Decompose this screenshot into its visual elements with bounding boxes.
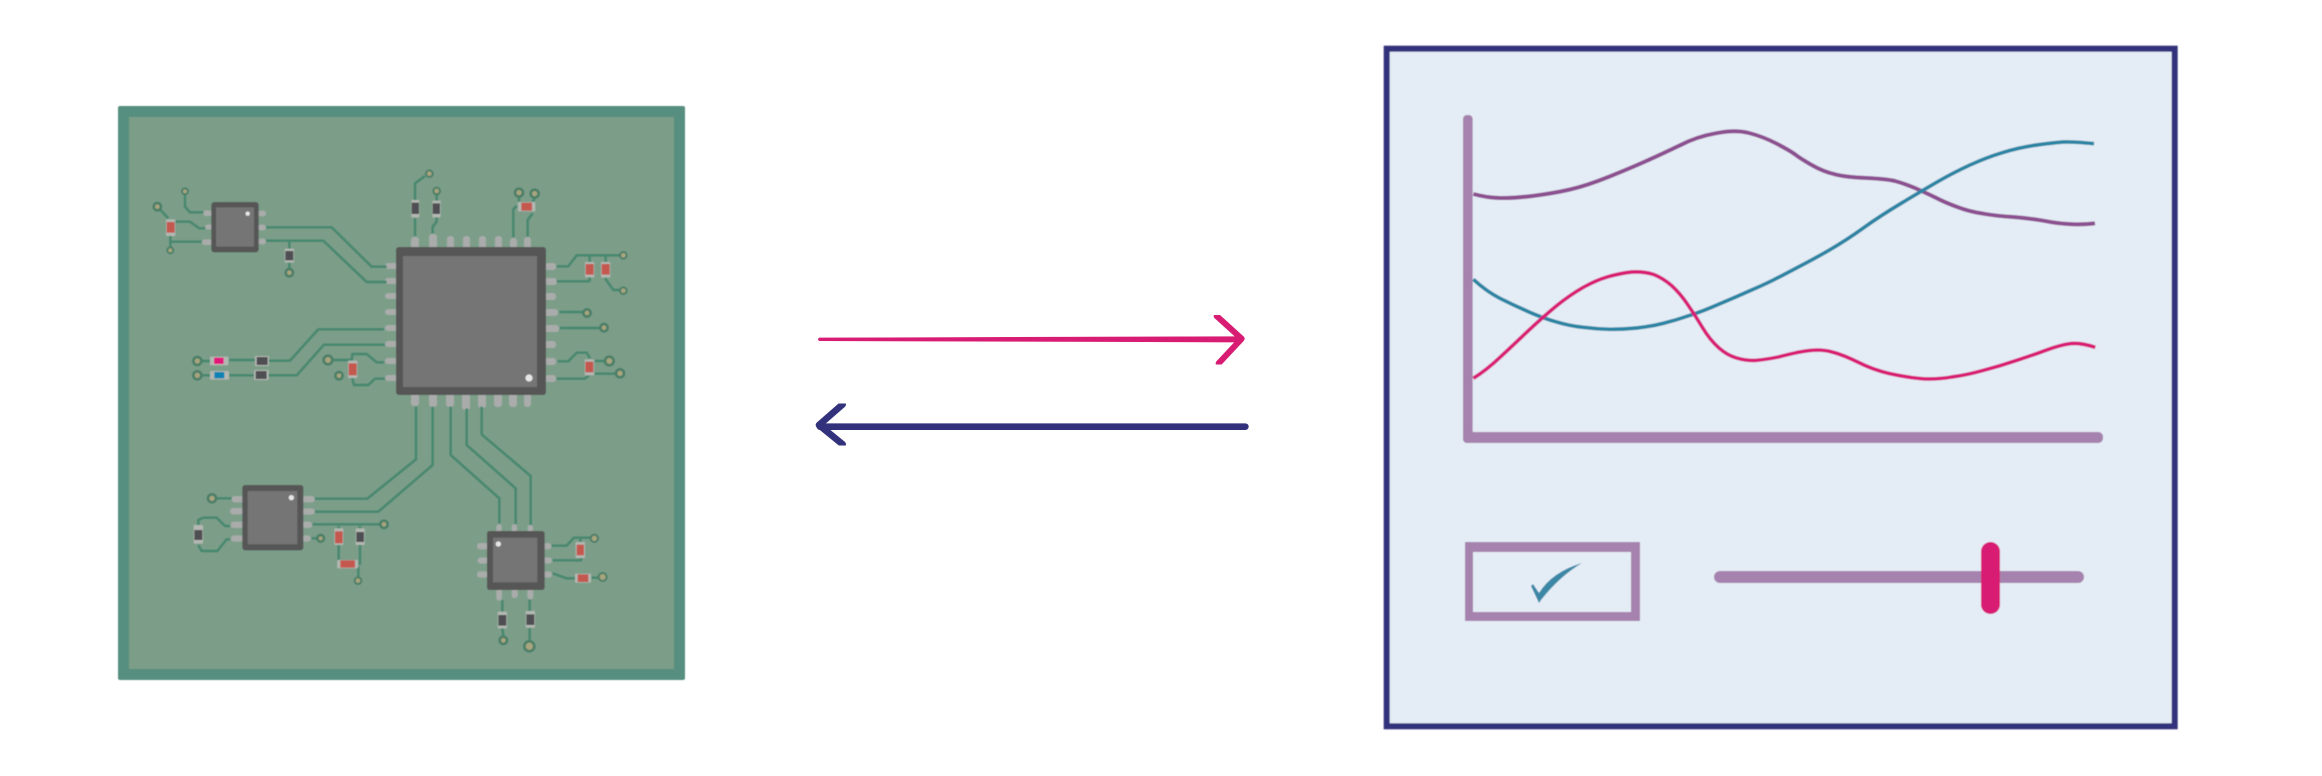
checkbox bbox=[1465, 542, 1640, 621]
left-side LED components and traces bbox=[193, 329, 385, 385]
curve: pink series bbox=[1473, 272, 2095, 379]
main microcontroller chip bbox=[385, 234, 559, 410]
right-side components and traces bbox=[557, 252, 627, 379]
slider bbox=[1714, 542, 2084, 614]
panel: user interface window bbox=[1387, 49, 2175, 726]
bottom-right chip and traces bbox=[451, 407, 607, 651]
slider track bbox=[1714, 571, 2084, 583]
panel: circuit board bbox=[118, 106, 685, 680]
curve: mauve series bbox=[1473, 131, 2095, 224]
slider handle bbox=[1981, 542, 2000, 614]
check mark bbox=[1531, 563, 1582, 603]
arrow: board to interface bbox=[818, 316, 1242, 363]
chart axes bbox=[1463, 115, 2103, 443]
window frame bbox=[1387, 49, 2175, 726]
board substrate bbox=[118, 106, 685, 680]
curve: teal series bbox=[1473, 142, 2094, 329]
top header components and traces bbox=[411, 170, 539, 237]
arrow: interface to board bbox=[819, 404, 1245, 444]
top-left chip and traces bbox=[154, 188, 387, 282]
bottom-left chip and traces bbox=[194, 407, 433, 584]
line chart bbox=[1463, 115, 2103, 443]
